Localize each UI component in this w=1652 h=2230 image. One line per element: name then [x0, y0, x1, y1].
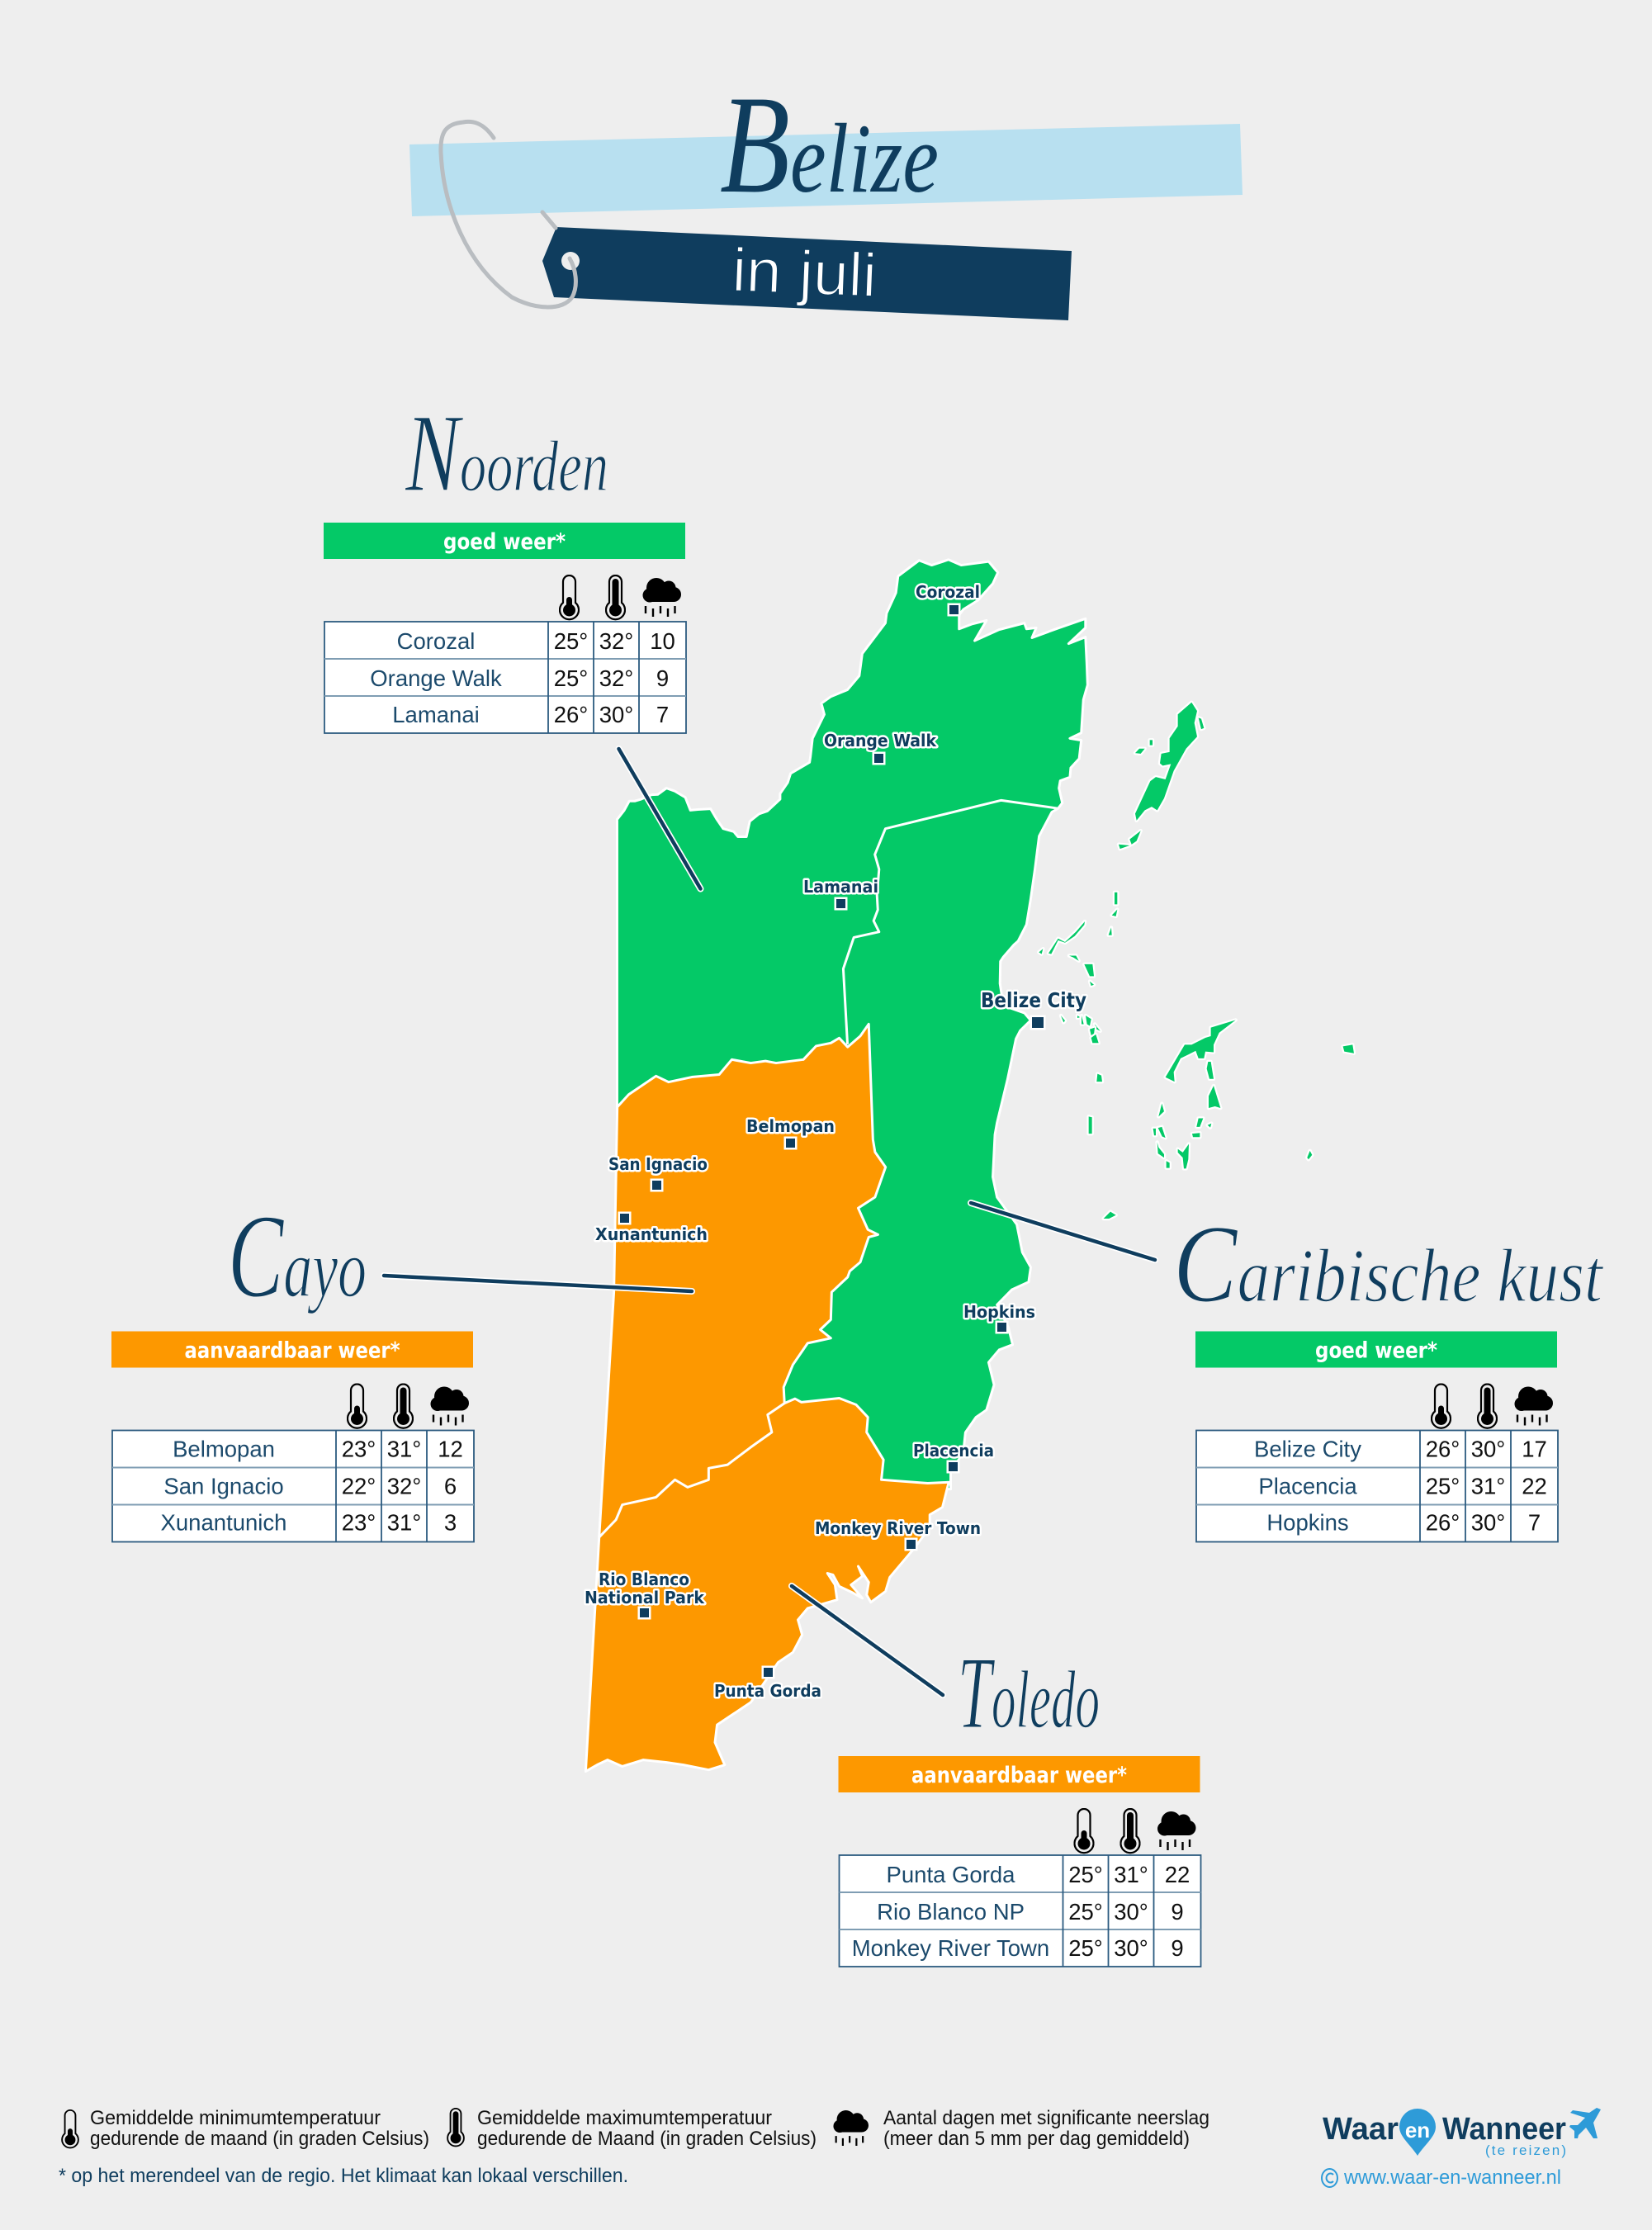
- climate table: Corozal: [397, 628, 475, 654]
- city: Monkey River Town: [815, 1518, 981, 1549]
- banner: aanvaardbaar weer: aanvaardbaar weer*: [185, 1338, 400, 1364]
- climate table: 22: [1165, 1862, 1190, 1887]
- tag string: [441, 121, 575, 307]
- city labels and markers: [585, 582, 1086, 1701]
- climate table: [1196, 1430, 1558, 1542]
- banner: aanvaardbaar weer: aanvaardbaar weer*: [911, 1763, 1127, 1788]
- icon: min temperature: [560, 575, 579, 619]
- climate table: [839, 1855, 1200, 1967]
- climate table: 17: [1522, 1437, 1547, 1461]
- climate table: Belize City: [1254, 1437, 1361, 1461]
- banner: goed weer: goed weer*: [443, 529, 566, 555]
- climate table: Monkey River Town: [852, 1935, 1049, 1961]
- climate table: 23°: [342, 1437, 376, 1461]
- tag hole: [561, 252, 580, 270]
- icon: max temperature: [394, 1384, 413, 1428]
- leader line: Caribische kust: [971, 1203, 1155, 1260]
- climate table: 25°: [554, 628, 588, 654]
- climate table: 6: [444, 1473, 457, 1499]
- icon: rain: [431, 1387, 469, 1425]
- city: Monkey River Town: Monkey River Town: [815, 1518, 981, 1538]
- icon: max temperature: [1478, 1384, 1497, 1428]
- climate table: San Ignacio: [163, 1473, 284, 1499]
- climate table: 9: [1171, 1935, 1184, 1961]
- climate table: [112, 1430, 474, 1542]
- climate table: 7: [656, 702, 669, 727]
- climate table: 22: [1522, 1473, 1547, 1499]
- heading: Cayo: Cayo: [228, 1191, 367, 1323]
- climate table: 30°: [1471, 1437, 1505, 1461]
- legend text: max temperature: Gemiddelde maximumtemperatuur: [477, 2107, 772, 2129]
- icon: legend max temperature: [447, 2109, 464, 2146]
- city: Orange Walk: [824, 731, 937, 763]
- title: Belize: Belize: [720, 67, 939, 222]
- icon: min temperature: [1432, 1384, 1451, 1428]
- climate table: 25°: [554, 665, 588, 691]
- city: San Ignacio: San Ignacio: [608, 1154, 708, 1174]
- climate table: 9: [656, 665, 669, 691]
- copyright mark: [1322, 2169, 1337, 2187]
- climate table: 30°: [599, 702, 633, 727]
- region: north and Caribbean coast (green): [617, 560, 1087, 1489]
- icon: rain: [1157, 1811, 1195, 1850]
- icon: rain: [642, 578, 681, 617]
- icon: max temperature: [1121, 1809, 1139, 1853]
- city: Corozal: Corozal: [916, 582, 980, 602]
- website url: www.waar-en-wanneer.nl: [1343, 2166, 1561, 2189]
- climate table: 25°: [1068, 1935, 1103, 1961]
- city: Hopkins: Hopkins: [963, 1302, 1035, 1322]
- climate table: Lamanai: [392, 702, 480, 727]
- banner: aanvaardbaar weer: [839, 1756, 1200, 1792]
- leader line: Noorden: [619, 749, 700, 888]
- leader line: Toledo: [792, 1586, 943, 1695]
- climate table: 30°: [1471, 1509, 1505, 1536]
- legend text: min temperature: Gemiddelde minimumtemperatuur: [90, 2107, 381, 2129]
- city: Placencia: [913, 1441, 994, 1471]
- banner: goed weer: [1195, 1331, 1557, 1367]
- city: Lamanai: [803, 877, 878, 908]
- icon: location pin: [1399, 2109, 1436, 2156]
- panel: Toledo: [839, 1756, 1200, 1967]
- banner: aanvaardbaar weer: [111, 1331, 473, 1367]
- climate table: Belmopan: [173, 1437, 275, 1461]
- icon: legend rain: [833, 2110, 869, 2146]
- climate table: 26°: [554, 702, 588, 727]
- city: Punta Gorda: [714, 1668, 821, 1701]
- map of Belize: [585, 560, 1354, 1772]
- icon: airplane: [1569, 2108, 1601, 2138]
- city: San Ignacio: [608, 1154, 708, 1190]
- icon: min temperature: [348, 1384, 367, 1428]
- icon: rain: [1514, 1387, 1553, 1425]
- city: Rio Blanco National Park: Rio Blanco: [599, 1570, 689, 1589]
- climate table: Punta Gorda: [887, 1862, 1015, 1887]
- climate table: 26°: [1426, 1437, 1460, 1461]
- legend: [59, 2107, 1209, 2187]
- climate table: 10: [650, 628, 675, 654]
- city: Belize City: Belize City: [981, 988, 1086, 1012]
- city: Orange Walk: Orange Walk: [824, 731, 937, 750]
- logo: Waar en Wanneer: [1322, 2108, 1601, 2189]
- icon: min temperature: [1075, 1809, 1093, 1853]
- leader line: Cayo: [384, 1276, 692, 1291]
- climate table: 25°: [1068, 1862, 1103, 1887]
- climate table: 30°: [1114, 1935, 1148, 1961]
- panel: Cayo: [111, 1331, 474, 1542]
- title block: [409, 67, 1243, 320]
- climate table: 31°: [387, 1509, 421, 1536]
- city: Xunantunich: Xunantunich: [595, 1224, 708, 1244]
- legend text: rain: Aantal dagen met significante neerslag: [883, 2107, 1209, 2129]
- climate table: 9: [1171, 1899, 1184, 1925]
- legend text: max temperature: gedurende de Maand (in graden Celsius): [477, 2128, 817, 2150]
- city: Corozal: [916, 582, 980, 614]
- legend text: rain: (meer dan 5 mm per dag gemiddeld): [883, 2128, 1190, 2150]
- dark tag: [542, 227, 1072, 320]
- city: Punta Gorda: Punta Gorda: [714, 1681, 821, 1701]
- climate table: 31°: [387, 1437, 421, 1461]
- logo tagline: (te reizen): [1485, 2142, 1566, 2158]
- climate table: Hopkins: [1266, 1509, 1349, 1536]
- climate table: 23°: [342, 1509, 376, 1536]
- panel: Caribische kust: [1195, 1331, 1558, 1542]
- climate table: 31°: [1114, 1862, 1148, 1887]
- city: Belmopan: Belmopan: [746, 1116, 835, 1136]
- climate table: 25°: [1068, 1899, 1103, 1925]
- climate table: 22°: [342, 1473, 376, 1499]
- city: Rio Blanco National Park: [585, 1570, 705, 1617]
- legend text: min temperature: gedurende de maand (in graden Celsius): [90, 2128, 429, 2150]
- climate table: Rio Blanco NP: [877, 1899, 1025, 1925]
- climate table: [324, 622, 686, 733]
- icon: max temperature: [606, 575, 625, 619]
- city: Rio Blanco National Park: National Park: [585, 1588, 705, 1607]
- city: Lamanai: Lamanai: [803, 877, 878, 897]
- climate table: 26°: [1426, 1509, 1460, 1536]
- city: Placencia: Placencia: [913, 1441, 994, 1461]
- logo word: Waar: Waar: [1323, 2112, 1399, 2147]
- heading: Toledo: Toledo: [958, 1636, 1100, 1750]
- climate table: Xunantunich: [161, 1509, 286, 1536]
- climate table: 7: [1528, 1509, 1541, 1536]
- climate table: Orange Walk: [370, 665, 502, 691]
- icon: legend min temperature: [62, 2110, 78, 2147]
- banner: goed weer: goed weer*: [1315, 1338, 1437, 1364]
- climate table: 32°: [387, 1473, 421, 1499]
- offshore islands: [1039, 703, 1354, 1219]
- light blue title band: [409, 124, 1243, 216]
- city: Belize City: [981, 988, 1086, 1028]
- heading: Noorden: Noorden: [405, 392, 608, 515]
- border: north / coast: [843, 800, 1058, 1044]
- region: Cayo and Toledo (orange): [585, 1024, 949, 1772]
- logo word: Wanneer: Wanneer: [1442, 2112, 1566, 2147]
- climate table: 32°: [599, 628, 633, 654]
- heading: Caribische kust: Caribische kust: [1173, 1203, 1604, 1326]
- subtitle: in juli: in juli: [731, 235, 878, 310]
- climate table: 3: [444, 1509, 457, 1536]
- climate table: 32°: [599, 665, 633, 691]
- climate table: 25°: [1426, 1473, 1460, 1499]
- footnote: * op het merendeel van de regio. Het klimaat kan lokaal verschillen.: [59, 2165, 628, 2187]
- panel: Noorden: [324, 523, 686, 733]
- city: Xunantunich: [595, 1214, 708, 1244]
- climate table: 31°: [1471, 1473, 1505, 1499]
- city: Belmopan: [746, 1116, 835, 1148]
- climate table: Placencia: [1258, 1473, 1357, 1499]
- banner: goed weer: [324, 523, 685, 559]
- logo word: en: en: [1405, 2118, 1430, 2142]
- city: Hopkins: [963, 1302, 1035, 1332]
- climate table: 12: [438, 1437, 463, 1461]
- border: Cayo / Toledo: [599, 1404, 784, 1537]
- climate table: 30°: [1114, 1899, 1148, 1925]
